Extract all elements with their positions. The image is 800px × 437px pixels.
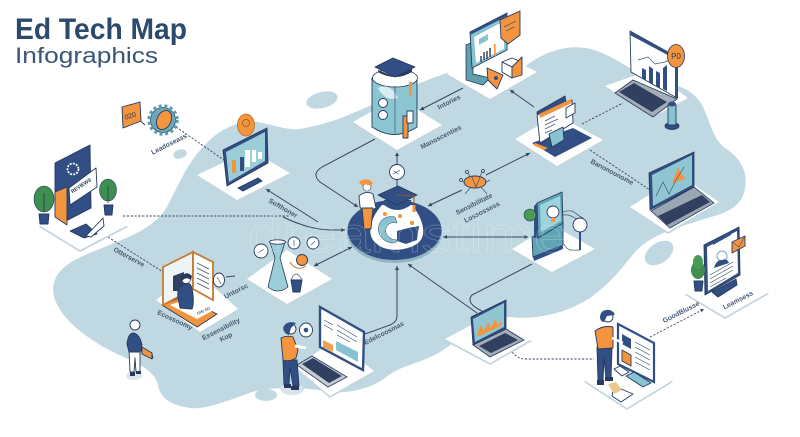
icon: hand bubble [214,273,224,287]
panel: laptop with orange chart [445,300,532,365]
panel: laptop with line chart [605,31,688,130]
figure: standing person with case [126,320,153,380]
icon: orange medal [238,114,254,136]
labels: GoodBlusse [662,300,701,325]
labels: Kop [219,332,234,344]
icon: box [502,57,522,78]
labels [112,94,755,347]
title: Ed Tech Map [15,13,187,46]
labels: Lossossess [463,201,501,225]
icon: small shield [487,68,503,89]
labels: Banonoonome [589,158,635,187]
panel: person at computer [584,310,673,410]
panel: book booth with student [156,252,238,334]
panel: resume clipboard [685,227,769,319]
panel: central graduation hub [347,164,442,263]
bar chart [232,150,262,173]
icon: small lamp [665,102,679,130]
labels: Ecossoomy [156,309,194,332]
labels: Leadoseass [150,133,188,157]
watermark: dreamstime [248,207,568,263]
labels: Softhoner [267,198,299,220]
labels: Manoscenties [420,124,463,151]
panel: student at laptop [280,307,374,398]
title [15,13,187,68]
panel: hourglass and bubbles [247,237,332,306]
panel: digital kiosk [512,192,595,274]
icon: orange chip and gear [122,102,177,134]
panel: left poster and laptop [34,145,128,252]
labels: Untorsc [223,283,250,301]
labels: Intories [437,94,462,111]
panel: open book page [515,96,603,168]
icon: left tree [34,186,54,224]
figure: person [595,310,623,385]
icon: orange badge: P0 [671,52,681,61]
figure: teacher [359,179,376,229]
connector lines and arrows [108,88,704,359]
panel: laptop with mountain chart [630,152,719,234]
icon: bubbles [254,237,319,258]
labels: Sensibilitate [455,192,494,217]
panel: sensor node [460,170,490,194]
icon: white bubble [390,164,404,180]
panel: monitor with bar chart [197,114,290,203]
panel: dashboard with shields [447,11,537,101]
panel: book booth with student: ore so [196,305,211,317]
panel: graduation cylinder [353,58,442,153]
icon: right tree [100,179,116,215]
icon: info bubble [300,323,312,337]
icon: plant [691,255,705,291]
labels: Edelcoosmas [363,320,406,347]
background blob map [53,47,746,408]
labels: Leamsess [722,290,755,311]
icon: small laptop [70,218,104,238]
icon: envelope [732,236,745,253]
figure: student [280,322,306,395]
panel: left poster and laptop: REVIEWS [70,177,93,195]
icon: orange shield [500,11,520,44]
labels: Otterserve [112,247,146,269]
icon: orange chip and gear: 020 [124,111,137,122]
labels: Essensibility [201,317,242,342]
title: Infographics [15,43,158,68]
